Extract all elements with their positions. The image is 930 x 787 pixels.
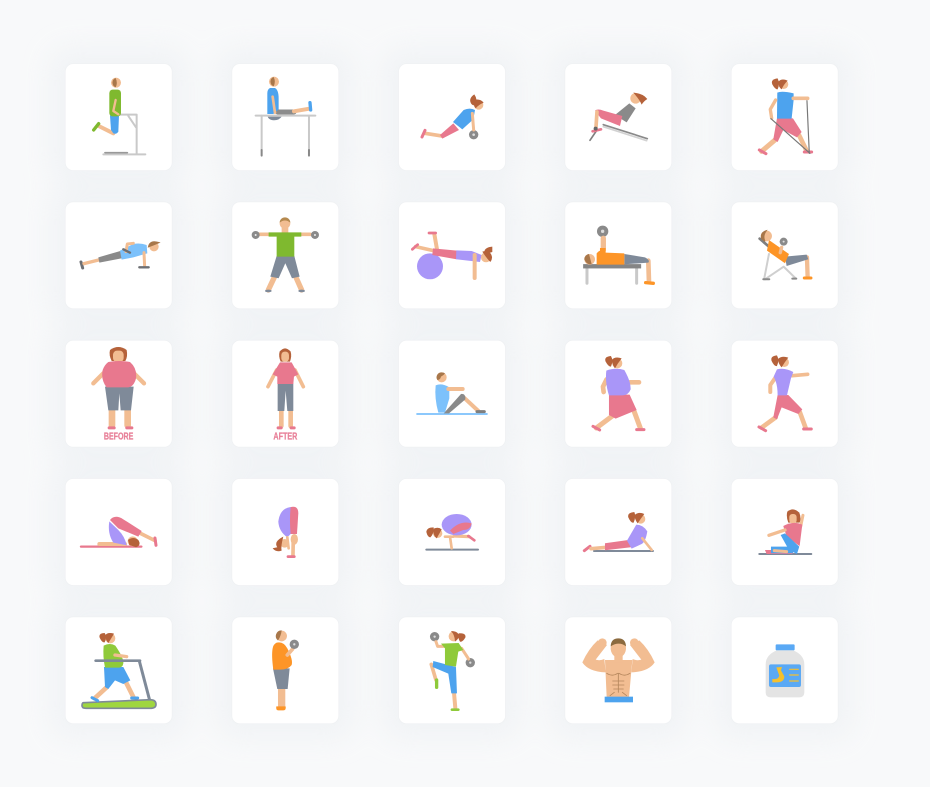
card: man doing lateral raise (232, 202, 339, 309)
card: yoga cobra pose (565, 478, 672, 586)
card: woman with resistance band (731, 64, 838, 171)
icon: heavy runner (593, 356, 644, 430)
card: yoga crow pose (398, 478, 506, 586)
card: yoga forward fold (232, 478, 339, 586)
card: man doing bar dip lunge (65, 64, 172, 171)
icon: standing forward bend (273, 507, 298, 557)
icon: treadmill runner (82, 633, 156, 708)
icon: plank on purple ball (412, 233, 492, 279)
icon: dumbbell knee raise (430, 631, 475, 710)
label: BEFORE: BEFORE (104, 432, 134, 442)
icon: crow pose (426, 514, 478, 550)
icon: runner (759, 355, 811, 431)
card: man doing incline dumbbell press (731, 202, 838, 309)
card: overweight woman running (565, 340, 672, 447)
card: woman with dumbbells knee raise (398, 617, 506, 724)
card: yoga seated twist (731, 478, 838, 586)
card: woman on treadmill (65, 617, 172, 724)
icon: supplement jar (766, 644, 804, 697)
icon: band lunge (759, 78, 812, 154)
icon: cobra pose (584, 512, 653, 551)
card: overweight man with dumbbell (232, 617, 339, 724)
card: after figure (232, 340, 339, 447)
icon: overweight woman (93, 347, 144, 429)
card: bodybuilder flexing (565, 617, 672, 724)
card: woman with ab roller (398, 64, 506, 171)
card: slim woman running (731, 340, 838, 447)
card: man doing L-sit on bars (232, 64, 339, 171)
icon: man at parallel bar (94, 78, 145, 154)
icon: lateral raise (252, 217, 319, 292)
icon: bench press (583, 226, 653, 283)
icon: kneeling woman on ball (422, 94, 484, 139)
label: AFTER: AFTER (273, 432, 298, 442)
icon: muscular torso (582, 638, 655, 702)
card: protein supplement jar (731, 617, 838, 724)
icon: L-sit on table (256, 77, 315, 156)
icon: seated twist (759, 509, 811, 554)
card: man doing sit-up (398, 340, 506, 447)
card: yoga plow pose (65, 478, 172, 586)
card: woman on incline bench sit-up (565, 64, 672, 171)
icon: plank row (81, 242, 159, 268)
icon: sit-up on mat (417, 372, 487, 414)
card: man doing bench press (565, 202, 672, 309)
card: before figure (65, 340, 172, 447)
icon: plow pose (81, 517, 156, 547)
card: woman planking on exercise ball (398, 202, 506, 309)
icon: incline bench press (760, 231, 811, 279)
icon: man curling dumbbell (272, 631, 299, 710)
icon: incline sit-up (590, 93, 647, 141)
card: man doing dumbbell plank (65, 202, 172, 309)
icon: slim woman (268, 348, 303, 429)
